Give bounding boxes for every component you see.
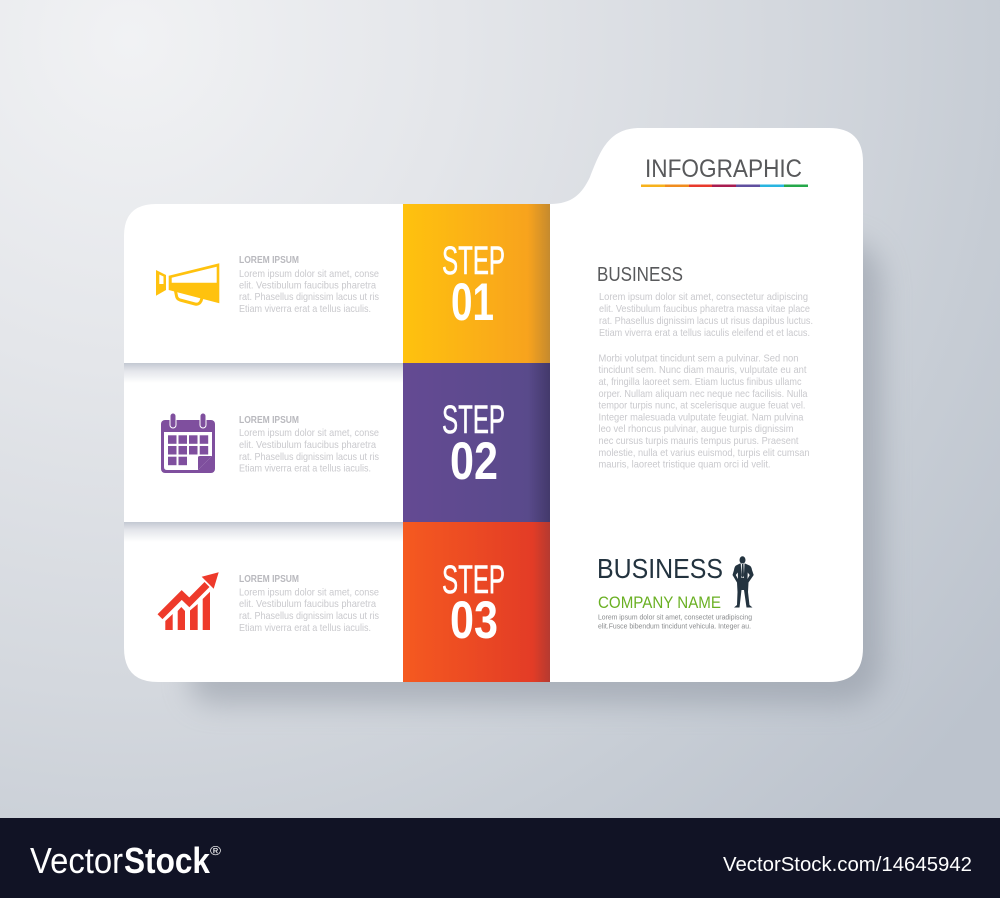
text: business paragraph 2: Morbi volutpat tincidunt sem a pulvinar. Sed non [598,352,799,364]
text: business paragraph 1: Lorem ipsum dolor sit amet, consectetur adipiscing [599,291,808,303]
row shadow 2 [124,522,403,542]
row shadow 1 [124,363,403,383]
text: business paragraph 1: Etiam viverra erat a tellus iaculis eleifend et et lacus. [599,327,810,339]
title: INFOGRAPHIC [645,155,802,183]
footer logo [30,840,221,881]
step 1 block [403,204,550,363]
text: business paragraph 2: tincidunt sem. Nunc diam mauris, vulputate eu ant [598,364,807,376]
step 2 block [403,363,550,522]
text: business paragraph 2: at, fringilla laoreet sem. Etiam luctus finibus ullamc [598,376,802,388]
company tagline: elit.Fusce bibendum tincidunt vehicula. Integer au. [598,622,751,630]
text: step 2 description: elit. Vestibulum faucibus pharetra [239,439,376,451]
text: step 1 description: Lorem ipsum dolor sit amet, conse [239,268,379,280]
text: step 3 description [239,573,379,634]
icon: megaphone [156,263,219,304]
icon: growth chart [160,572,219,630]
company logo: business: BUSINESS [597,553,723,584]
step 1 block: STEP [442,239,505,283]
footer url: VectorStock.com/14645942 [723,853,972,876]
text: step 1 description: Etiam viverra erat a tellus iaculis. [239,303,371,315]
text: business paragraph 2: leo vel rhoncus pulvinar, augue turpis dignissim [598,423,794,435]
text: business paragraph 2: tempor turpis nunc, at scelerisque augue feuat vel. [598,400,806,412]
text: business paragraph 2: molestie, nulla et varius euismod, turpis elit cumsan [598,447,810,459]
footer logo: ® [210,843,221,858]
text: business paragraph 2: Integer malesuada vulputate feugiat. Nam pulvina [598,412,804,424]
folder card [124,128,863,682]
text: step 1 description: LOREM IPSUM [239,254,299,266]
heading: business: BUSINESS [597,264,683,286]
text: step 2 description [239,414,379,474]
step 3 block: 03 [450,591,498,650]
text: business paragraph 2 [598,352,810,470]
company name: COMPANY NAME [598,593,721,612]
title rainbow underline [641,184,808,187]
text: step 3 description: rat. Phasellus dignissim lacus ut ris [239,610,379,622]
text: step 2 description: LOREM IPSUM [239,414,299,426]
text: step 2 description: rat. Phasellus dignissim lacus ut ris [239,451,379,463]
company tagline: Lorem ipsum dolor sit amet, consectet uradipiscing [598,612,752,622]
text: business paragraph 1: elit. Vestibulum faucibus pharetra massa vitae place [599,303,810,315]
step 3 block: STEP [442,558,505,602]
text: business paragraph 2: mauris, laoreet tristique quam orci id velit. [598,458,770,470]
footer logo: Vector [30,840,123,881]
text: step 2 description: Etiam viverra erat a tellus iaculis. [239,462,371,474]
text: step 3 description: LOREM IPSUM [239,573,299,585]
card shadow [190,240,882,704]
text: step 2 description: Lorem ipsum dolor sit amet, conse [239,427,379,439]
text: step 1 description: elit. Vestibulum faucibus pharetra [239,280,376,292]
text: business paragraph 1 [599,291,813,339]
text: step 3 description: elit. Vestibulum faucibus pharetra [239,598,376,610]
icon: businessman [732,556,754,608]
step 1 block: 01 [451,273,494,332]
text: business paragraph 1: rat. Phasellus dignissim lacus ut risus dapibus luctus. [599,315,813,327]
step 2 block: STEP [442,398,505,442]
step 2 block: 02 [450,432,498,491]
step 3 block [403,522,550,682]
footer bar [0,818,1000,898]
footer logo: Stock [124,840,211,881]
text: step 1 description: rat. Phasellus dignissim lacus ut ris [239,291,379,303]
icon: calendar [161,413,215,473]
text: business paragraph 2: nec cursus turpis mauris tempus purus. Praesent [598,435,799,447]
text: step 3 description: Lorem ipsum dolor sit amet, conse [239,586,379,598]
text: step 3 description: Etiam viverra erat a tellus iaculis. [239,622,371,634]
text: step 1 description [239,254,379,315]
text: business paragraph 2: orper. Nullam aliquam nec neque nec facilisis. Nulla [598,388,808,400]
company tagline [598,612,752,630]
